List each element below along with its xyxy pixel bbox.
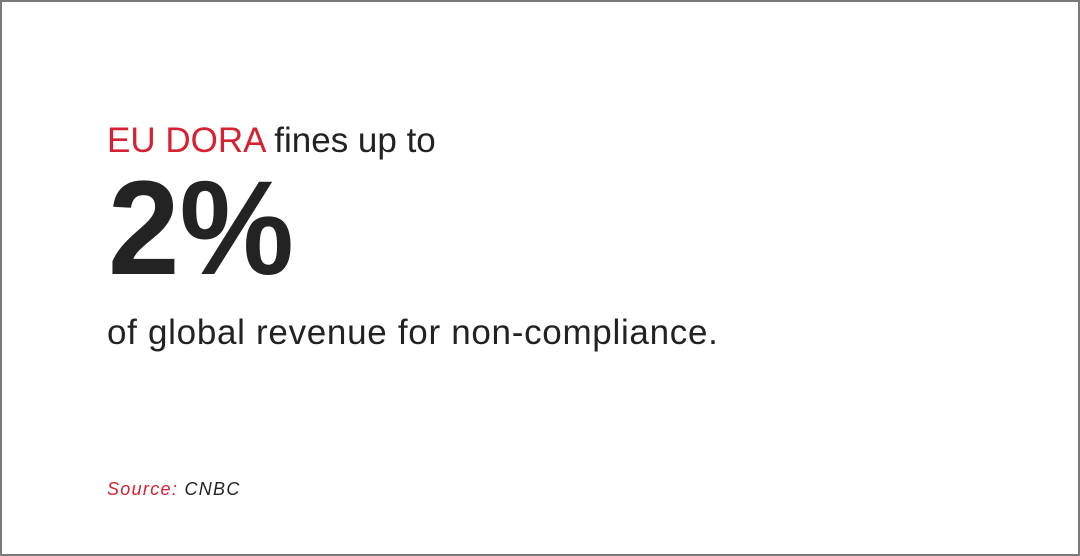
text block: of global revenue: of global revenue for non-compliance. <box>107 313 719 352</box>
big stat: 2%: 2% <box>108 154 294 303</box>
heading: EU DORA fines up to: EU DORA fines up to <box>107 121 436 160</box>
source: Source: CNBC <box>107 479 241 499</box>
